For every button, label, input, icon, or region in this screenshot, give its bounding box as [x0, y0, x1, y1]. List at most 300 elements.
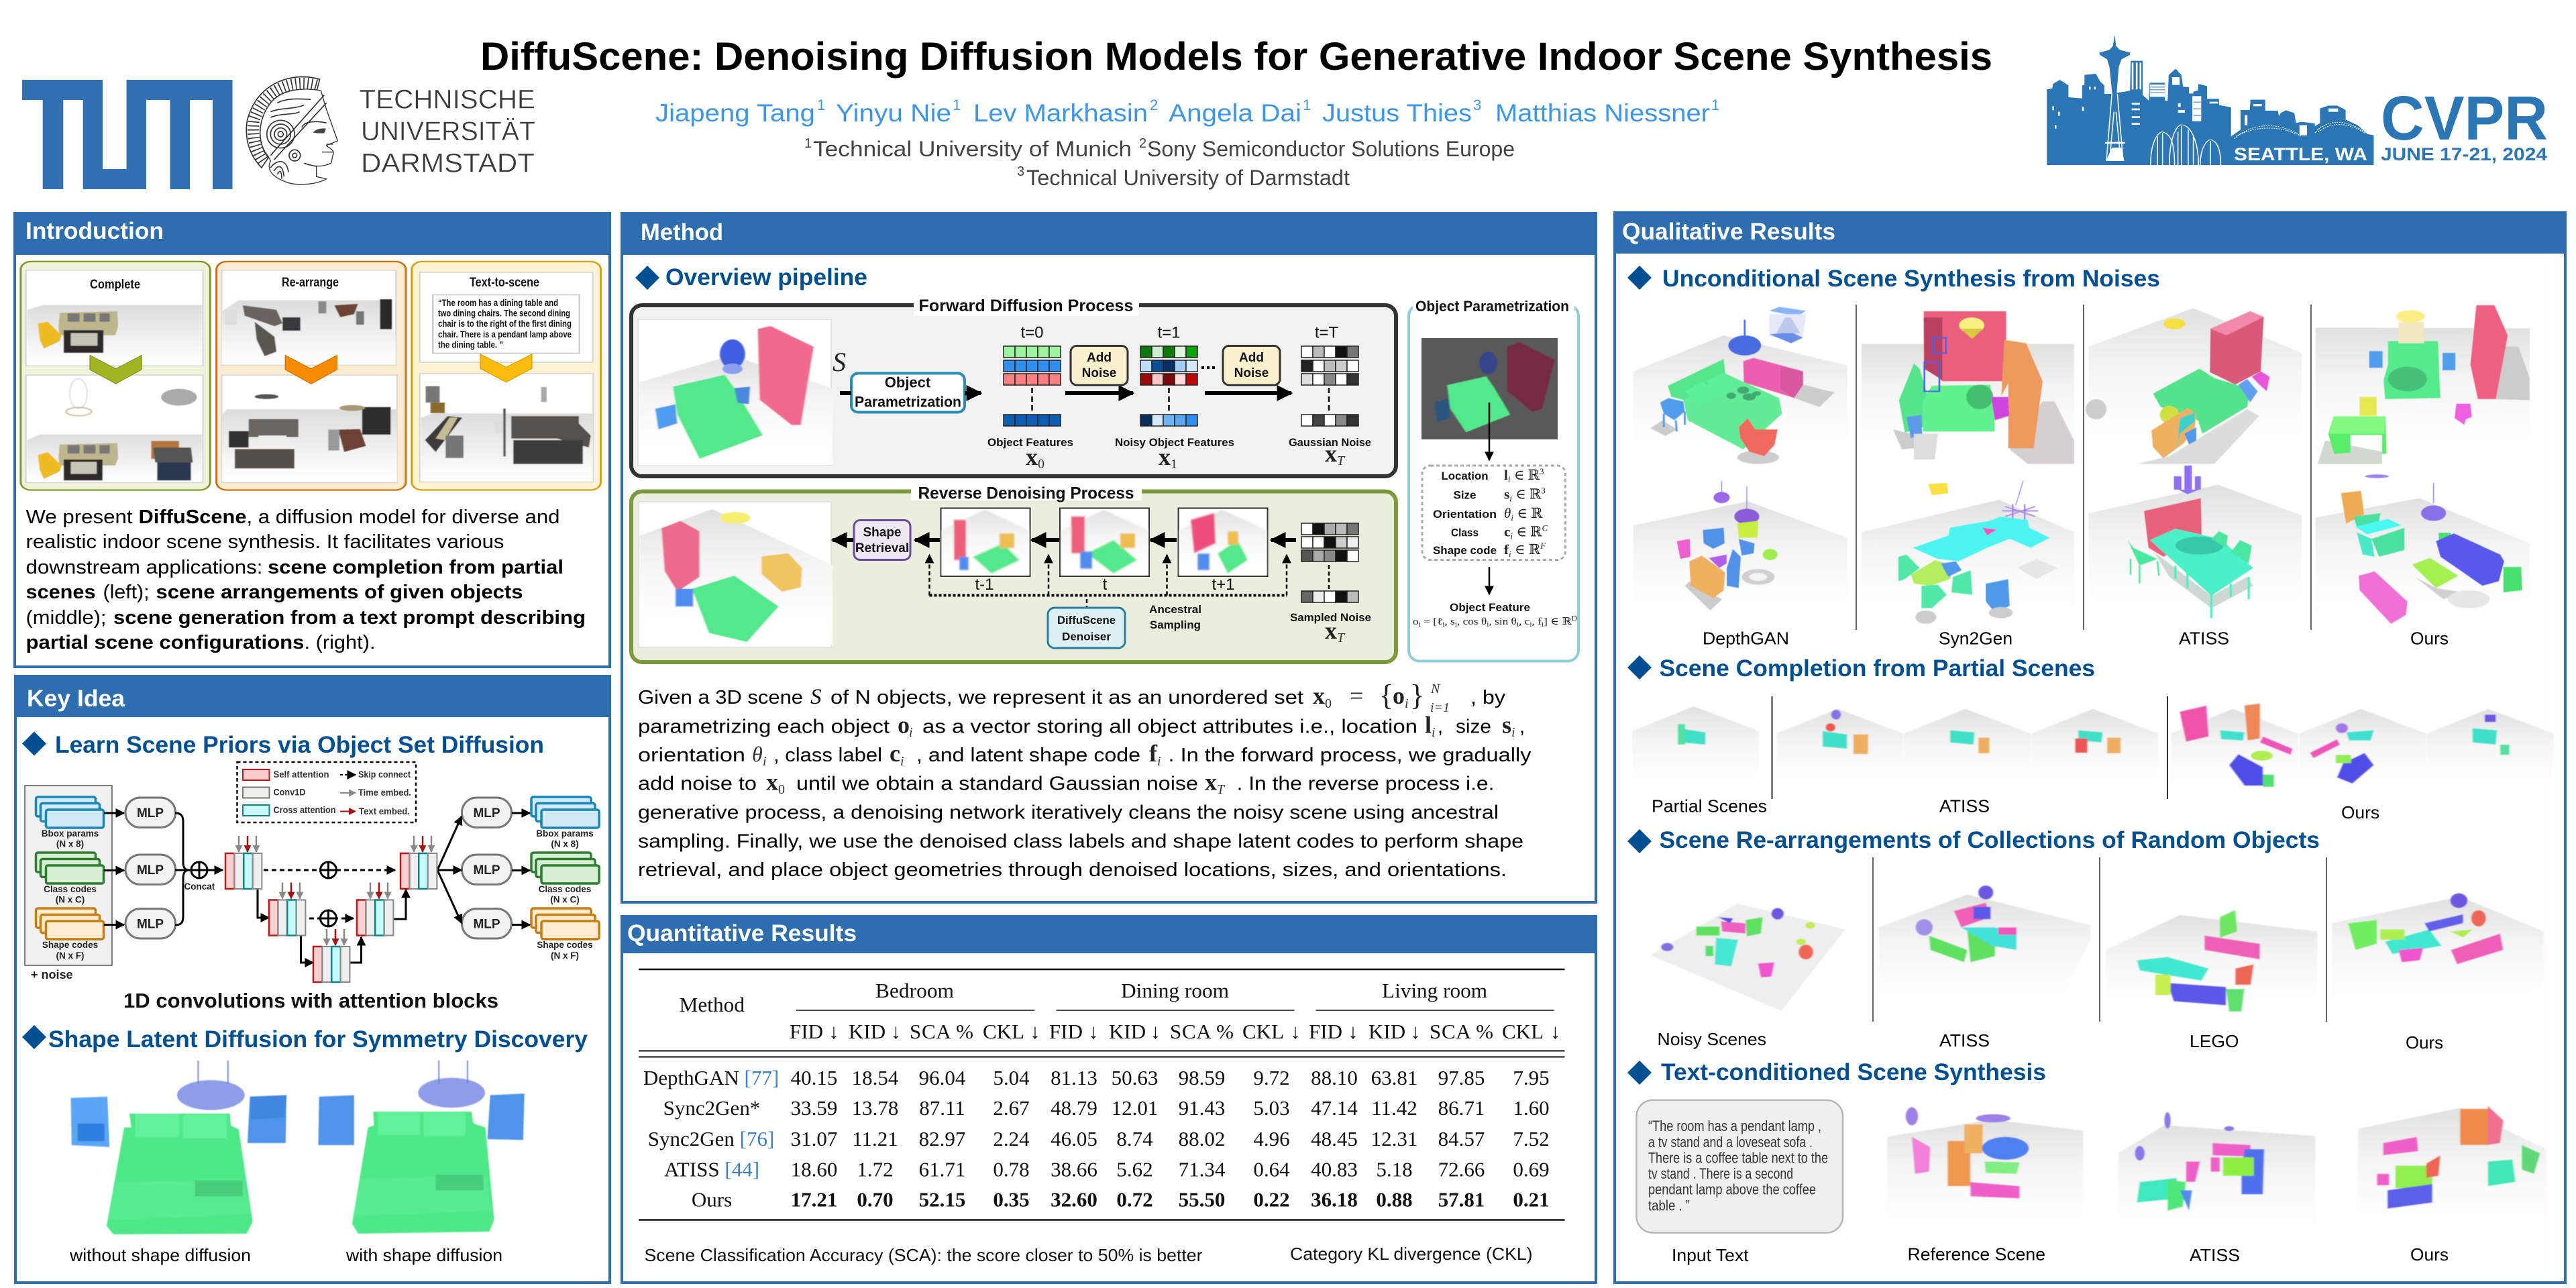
diagram: object parametrization: , f: [1532, 616, 1542, 627]
results table: 46.05: [1051, 1127, 1097, 1150]
subheading: Shape Latent Diffusion: Shape Latent Diffusion for Symmetry Discovery: [48, 1026, 588, 1053]
image grid: scene re-arrangement: [1651, 857, 2544, 1022]
text block: introduction paragraph: partial scene configurations: [25, 632, 305, 653]
results table: 0.69: [1513, 1158, 1550, 1181]
text block: method paragraph: , by: [1470, 687, 1506, 708]
diagram: object parametrization: i: [1508, 474, 1511, 484]
text block: introduction paragraph: scene completion from partial: [268, 557, 564, 578]
results table: 86.71: [1438, 1096, 1485, 1120]
callout: input text: a tv stand and a loveseat sofa .: [1648, 1134, 1813, 1150]
illustrations: complete, re-arrange, text-to-scene: chair. There is a pendant lamp above: [438, 329, 572, 339]
results table: 18.54: [852, 1066, 899, 1089]
results table: 2.67: [993, 1096, 1030, 1120]
results table: SCA %: [1170, 1020, 1234, 1043]
results table: KID: [849, 1020, 885, 1043]
results table: 88.10: [1311, 1066, 1358, 1089]
diagram: object parametrization: Size: [1453, 488, 1476, 502]
text block: method paragraph: add noise to: [638, 773, 757, 794]
diagram: object set diffusion U-Net: Shape codes: [42, 940, 98, 950]
results table: 40.15: [791, 1066, 837, 1089]
diagram: object set diffusion U-Net: Bbox params: [536, 828, 594, 839]
diagram: object parametrization: ∈ ℝ: [1510, 467, 1540, 483]
results table: 11.21: [852, 1127, 898, 1150]
diagram: reverse denoising process: x: [1325, 617, 1337, 644]
illustrations: complete, re-arrange, text-to-scene: Complete: [90, 278, 140, 292]
diagram: reverse denoising process: t: [1103, 576, 1108, 594]
authors: 2: [1150, 97, 1158, 113]
text block: method paragraph: of N objects, we represent it as an unordered set: [830, 687, 1303, 708]
label row: unconditional methods: Syn2Gen: [1939, 628, 2012, 648]
callout: input text: table . ”: [1648, 1197, 1690, 1214]
results table: 52.15: [919, 1187, 965, 1212]
token stack: t=0 object features: [1004, 346, 1061, 426]
results table: 32.60: [1051, 1187, 1097, 1212]
diagram: forward diffusion process: Noise: [1234, 366, 1269, 380]
diagram: object parametrization: i: [1511, 513, 1513, 523]
results table: CKL: [1242, 1020, 1284, 1043]
results table: 11.42: [1371, 1096, 1417, 1120]
affiliations: [804, 136, 1515, 190]
results table: 4.96: [1253, 1127, 1290, 1150]
diagram: object parametrization: F: [1540, 541, 1546, 551]
diagram: forward diffusion process: Object: [885, 374, 931, 390]
results table: 36.18: [1311, 1187, 1358, 1212]
results table: 55.50: [1179, 1187, 1225, 1212]
label row: re-arrangement methods: ATISS: [1939, 1030, 1990, 1051]
scenes: ATISS and Ours columns: [2086, 305, 2530, 625]
results table: 71.34: [1179, 1158, 1226, 1181]
text block: method paragraph: x: [1205, 769, 1217, 796]
results table: 88.02: [1179, 1127, 1225, 1150]
diagram: object parametrization: i: [1455, 621, 1457, 629]
diagram: forward diffusion process: Noise: [1082, 366, 1116, 380]
diagram: object set diffusion U-Net: Cross attention: [274, 805, 335, 815]
heading: Quantitative Results: Quantitative Results: [627, 920, 857, 947]
text block: method paragraph: f: [1149, 740, 1158, 767]
results table: 12.01: [1112, 1096, 1158, 1120]
caption: without shape diffusion: without shape diffusion: [69, 1245, 251, 1265]
illustrations: complete, re-arrange, text-to-scene: [21, 262, 601, 490]
diagram: reverse denoising process: Reverse Denoising Process: [918, 484, 1134, 503]
diagram: forward diffusion process: x: [1325, 440, 1337, 467]
results table: 47.14: [1311, 1096, 1358, 1120]
authors: Angela Dai: [1169, 99, 1301, 127]
results table: FID: [1309, 1020, 1342, 1043]
results table: 5.62: [1116, 1158, 1153, 1181]
results table: SCA %: [1430, 1020, 1493, 1043]
diagram: object parametrization: i: [1542, 621, 1544, 629]
text block: introduction paragraph: , a diffusion model for diverse and: [247, 506, 559, 528]
results table: 48.45: [1311, 1127, 1358, 1150]
diagram: object parametrization: ∈ ℝ: [1511, 541, 1541, 557]
results table: 1.60: [1513, 1096, 1550, 1120]
results table: 7.52: [1513, 1127, 1550, 1150]
callout: input text: “The room has a pendant lamp ,: [1648, 1118, 1821, 1134]
diagram: object parametrization: s: [1504, 486, 1509, 502]
logo: TU Darmstadt Athena head and wordmark: [246, 76, 535, 184]
text block: method paragraph: retrieval, and place object geometries through denoised locations, sizes, and orientations.: [638, 859, 1507, 881]
text block: method paragraph: Given a 3D scene: [638, 687, 803, 708]
affiliations: Technical University of Munich: [813, 137, 1132, 161]
diagram: forward diffusion process: Add: [1087, 351, 1112, 365]
text block: introduction paragraph: DiffuScene: [138, 506, 247, 528]
token stack: t=1 noisy object features: [1140, 346, 1197, 426]
text block: method paragraph: 0: [1325, 696, 1332, 711]
diagram: object parametrization: i: [1419, 621, 1421, 629]
label: ATISS completion: ATISS: [1939, 796, 1990, 816]
text block: method paragraph: i: [1405, 696, 1409, 711]
diagram: object set diffusion U-Net: (N x F): [551, 951, 579, 961]
results table: 5.18: [1376, 1158, 1413, 1181]
diagram: object set diffusion U-Net: MLP: [473, 918, 500, 931]
text block: introduction paragraph: scene generation from a text prompt describing: [113, 607, 586, 629]
diagram: object set diffusion U-Net: MLP: [137, 806, 164, 820]
results table: 7.95: [1513, 1066, 1550, 1089]
results table: Bedroom: [875, 979, 954, 1002]
authors: Justus Thies: [1322, 99, 1472, 127]
label row: text-conditioned methods: ATISS: [2190, 1245, 2240, 1265]
results table: 5.04: [993, 1066, 1030, 1089]
results table: 0.72: [1116, 1187, 1153, 1212]
diagram: object set diffusion U-Net: Class codes: [539, 884, 591, 894]
diagram: object set diffusion U-Net: Skip connect: [358, 769, 411, 780]
label row: text-conditioned methods: Ours: [2410, 1244, 2449, 1265]
label: Ours completion: Ours: [2341, 802, 2379, 822]
image grid: scene completion: [1632, 696, 2554, 799]
results table: 40.83: [1311, 1158, 1358, 1181]
text block: method paragraph: x: [1313, 682, 1325, 709]
text block: introduction paragraph: downstream applications:: [25, 557, 263, 578]
diagram: reverse denoising process: Denoiser: [1062, 631, 1111, 643]
diagram: forward diffusion process: t=T: [1315, 323, 1339, 342]
panel: Introduction: [14, 212, 610, 667]
diagram: object set diffusion U-Net: Shape codes: [537, 940, 593, 950]
results table: 91.43: [1179, 1096, 1225, 1120]
results table: ↓: [1030, 1020, 1040, 1043]
logo: CVPR Seattle skyline: SEATTLE, WA: [2234, 144, 2367, 164]
authors: 1: [953, 97, 961, 113]
diagram: object set diffusion U-Net: MLP: [137, 918, 164, 931]
subheading: Overview pipeline: Overview pipeline: [665, 264, 867, 290]
diagram: object parametrization: Orientation: [1433, 508, 1497, 521]
token stack: t=T gaussian noise: [1301, 346, 1358, 426]
results table: 13.78: [852, 1096, 898, 1120]
text block: method paragraph: {: [1379, 679, 1393, 712]
text block: method paragraph: o: [898, 711, 910, 738]
text block: method paragraph: i: [1511, 725, 1515, 740]
results table: 48.79: [1051, 1096, 1097, 1120]
text block: method paragraph: i: [763, 754, 767, 769]
title: DiffuScene: Denoising Diffusion Models for Generative Indoor Scene Synthesis: [480, 35, 1992, 78]
results table: ↓: [1150, 1020, 1161, 1043]
subheading: Text-conditioned: Text-conditioned Scene Synthesis: [1661, 1059, 2046, 1085]
logo: TU Darmstadt Athena head and wordmark: DARMSTADT: [361, 149, 535, 178]
diagram: object parametrization: Object Parametrization: [1415, 298, 1569, 315]
results table: 1.72: [857, 1158, 894, 1181]
footnote: CKL: Category KL divergence (CKL): [1290, 1244, 1532, 1264]
diagram: forward diffusion process: x: [1026, 443, 1038, 470]
authors: Jiapeng Tang: [655, 99, 815, 127]
text block: method paragraph: parametrizing each object: [638, 716, 890, 738]
text block: introduction paragraph: scenes: [25, 582, 95, 603]
caption: with shape diffusion: with shape diffusion: [345, 1245, 502, 1265]
diagram: object set diffusion U-Net: (N x C): [56, 895, 85, 904]
illustrations: complete, re-arrange, text-to-scene: the dining table. ”: [438, 339, 503, 350]
label row: text-conditioned methods: [1672, 1244, 2449, 1265]
text block: method paragraph: , class label: [773, 745, 882, 766]
text block: method paragraph: size: [1456, 716, 1491, 738]
diagram: object parametrization: i: [1509, 549, 1511, 559]
diagram: forward diffusion process: Object Features: [987, 436, 1073, 449]
diagram: reverse denoising process: Ancestral: [1149, 603, 1201, 616]
diagram: object parametrization: 3: [1541, 486, 1546, 495]
results table: 98.59: [1179, 1066, 1225, 1089]
diagram: object parametrization: Object Feature: [1450, 601, 1530, 614]
diagram: forward diffusion process: Noisy Object Features: [1115, 436, 1234, 449]
text block: method paragraph: , and latent shape code: [916, 745, 1140, 766]
label row: unconditional methods: Ours: [2410, 628, 2449, 648]
results table: 57.81: [1438, 1187, 1485, 1212]
diagram: object set diffusion U-Net: Concat: [184, 881, 215, 892]
diagram: object parametrization: i: [1529, 621, 1532, 629]
authors: 1: [817, 97, 825, 113]
results table: 31.07: [791, 1127, 837, 1150]
diagram: object set diffusion U-Net: + noise: [31, 968, 73, 981]
text block: method paragraph: =: [1350, 682, 1363, 709]
diagram: object set diffusion U-Net: (N x 8): [56, 839, 84, 849]
diagram: object set diffusion U-Net: (N x F): [56, 951, 85, 961]
diagram: object parametrization: , cos θ: [1457, 616, 1487, 627]
text block: method paragraph: i: [900, 754, 904, 769]
diagram: object parametrization: i: [1517, 621, 1519, 629]
diagram: forward diffusion process: Parametrization: [855, 393, 961, 411]
text block: introduction paragraph: . (right).: [305, 632, 376, 653]
results table: 97.85: [1438, 1066, 1485, 1089]
diagram: object set diffusion U-Net: (N x C): [550, 895, 580, 904]
label row: text-conditioned methods: Input Text: [1672, 1245, 1749, 1265]
diagram: object set diffusion U-Net: [25, 762, 599, 982]
results table: KID: [1368, 1020, 1405, 1043]
diagram: reverse denoising process: DiffuScene: [1057, 614, 1116, 627]
authors: Yinyu Nie: [836, 99, 951, 127]
subheading: Scene Re-arrangements: Scene Re-arrangements of Collections of Random Objects: [1660, 827, 2320, 853]
heading: Qualitative Results: Qualitative Results: [1622, 219, 1835, 245]
illustrations: complete, re-arrange, text-to-scene: Text-to-scene: [470, 276, 539, 290]
panel: Quantitative Results: [621, 915, 1597, 1283]
results table: ↓: [1290, 1020, 1301, 1043]
diagram: forward diffusion process: t=0: [1020, 323, 1044, 342]
diagram: object set diffusion U-Net: (N x 8): [551, 839, 579, 849]
results table: 17.21: [791, 1187, 837, 1212]
authors: 1: [1711, 97, 1719, 113]
diagram: reverse denoising process: T: [1337, 631, 1346, 645]
heading: Method: Method: [641, 219, 723, 246]
results table: 33.59: [791, 1096, 837, 1120]
label row: re-arrangement methods: [1657, 1029, 2443, 1053]
logo: CVPR Seattle skyline: [2047, 35, 2548, 165]
text block: method paragraph: N: [1430, 682, 1441, 696]
logo: TU Darmstadt Athena head and wordmark: UNIVERSITÄT: [361, 117, 535, 146]
diagram: object parametrization: Shape code: [1433, 544, 1497, 557]
results table: 0.88: [1376, 1187, 1413, 1212]
text block: method paragraph: orientation: [638, 745, 745, 766]
text block: method paragraph: i: [1432, 725, 1436, 740]
results table: 8.74: [1116, 1127, 1153, 1150]
label row: unconditional methods: DepthGAN: [1703, 628, 1789, 648]
results table: 0.70: [857, 1187, 894, 1212]
results table: 18.60: [791, 1158, 837, 1181]
panel: Method: [621, 212, 1597, 902]
authors: 1: [1303, 97, 1311, 113]
results table: Method: [679, 993, 745, 1016]
diagram: object parametrization: D: [1572, 615, 1577, 623]
results table: Sync2Gen [76]: [648, 1127, 774, 1150]
text block: method paragraph: 0: [778, 782, 785, 797]
diagram: forward diffusion process: 0: [1038, 457, 1044, 472]
diagram: object parametrization: f: [1504, 541, 1509, 557]
illustration: beds with and without shape diffusion: [71, 1061, 525, 1234]
affiliations: Technical University of Darmstadt: [1026, 166, 1350, 190]
label row: re-arrangement methods: Ours: [2406, 1032, 2443, 1053]
text block: introduction paragraph: scene arrangements of given objects: [156, 582, 523, 603]
text block: method paragraph: generative process, a denoising network iteratively cleans the noisy scene using ancestral: [638, 802, 1499, 824]
diagram: object parametrization: l: [1504, 467, 1508, 483]
affiliations: 2: [1139, 136, 1146, 151]
illustrations: complete, re-arrange, text-to-scene: chair is to the right of the first dining: [438, 318, 572, 329]
authors: [655, 97, 1719, 127]
results table: 84.57: [1438, 1127, 1485, 1150]
text block: method paragraph: o: [1393, 682, 1405, 709]
image grid: unconditional synthesis scenes: [1633, 305, 2530, 630]
subheading: Scene Completion: Scene Completion from Partial Scenes: [1660, 655, 2095, 682]
diagram: object parametrization: c: [1504, 523, 1510, 539]
callout: input text: tv stand . There is a second: [1648, 1165, 1793, 1182]
diagram: object parametrization: ∈ ℝ: [1513, 505, 1543, 521]
logo: CVPR Seattle skyline: JUNE 17-21, 2024: [2381, 144, 2547, 164]
text block: method paragraph: ,: [1438, 716, 1443, 738]
results table: 0.21: [1513, 1187, 1550, 1212]
image row: text-conditioned scenes: [1887, 1106, 2546, 1242]
diagram: forward diffusion process: S: [833, 347, 846, 377]
text block: method paragraph: ,: [1519, 716, 1525, 738]
diagram: object set diffusion U-Net: Class codes: [44, 884, 97, 894]
text block: method paragraph: i: [909, 725, 913, 740]
results table: FID: [790, 1020, 823, 1043]
results table: 0.64: [1253, 1158, 1290, 1181]
token stack: sampled noise: [1301, 523, 1358, 602]
text block: method paragraph: T: [1217, 782, 1226, 797]
diagram: forward diffusion process: Forward Diffusion Process: [919, 297, 1134, 315]
label: Partial Scenes: Partial Scenes: [1652, 796, 1767, 816]
callout: input text: There is a coffee table next to the: [1648, 1150, 1828, 1166]
results table: 5.03: [1253, 1096, 1290, 1120]
diagram: object parametrization: Class: [1451, 526, 1479, 539]
label row: unconditional methods: ATISS: [2179, 628, 2229, 648]
diagram: forward diffusion process: Add: [1239, 351, 1264, 365]
text block: introduction paragraph: We present: [25, 506, 133, 528]
diagram: reverse denoising process: Retrieval: [855, 541, 909, 555]
heading: Key Idea: Key Idea: [27, 686, 125, 712]
diagram: object parametrization: , c: [1519, 616, 1530, 627]
diagram: forward diffusion process: Gaussian Noise: [1289, 436, 1371, 449]
text block: method paragraph: . In the reverse process i.e.: [1237, 773, 1495, 794]
authors: Lev Markhasin: [973, 99, 1148, 127]
label row: re-arrangement methods: Noisy Scenes: [1657, 1029, 1766, 1049]
text block: method paragraph: i: [1157, 754, 1161, 769]
results table: Ours: [692, 1187, 732, 1212]
results table: KID: [1109, 1020, 1146, 1043]
results table: 0.78: [993, 1158, 1030, 1181]
panel: Key Idea: [14, 675, 610, 1283]
results table: Living room: [1382, 979, 1487, 1002]
diagram: object set diffusion U-Net: MLP: [473, 806, 500, 820]
text block: method paragraph: θ: [752, 742, 763, 766]
results table: 50.63: [1112, 1066, 1158, 1089]
results table: ↓: [1550, 1020, 1560, 1043]
results table: 0.35: [993, 1187, 1030, 1212]
results table: FID: [1049, 1020, 1083, 1043]
diagram: reverse denoising process: t+1: [1212, 576, 1235, 594]
results table: ATISS [44]: [664, 1158, 759, 1181]
diagram: object parametrization: i: [1442, 621, 1445, 629]
logo: TUM: [22, 80, 232, 189]
diagram: reverse denoising process: t-1: [975, 576, 994, 594]
label row: unconditional methods: [1703, 628, 2449, 648]
diagram: reverse denoising process: Sampled Noise: [1290, 611, 1371, 624]
diagram: object parametrization: , s: [1444, 616, 1455, 627]
footnote: SCA: Scene Classification Accuracy (SCA): the score closer to 50% is better: [644, 1245, 1203, 1265]
text block: method paragraph: sampling. Finally, we use the denoised class labels and shape latent codes to perform shape: [638, 830, 1523, 852]
subheading: Unconditional Scene Synthesis: Unconditional Scene Synthesis from Noises: [1662, 266, 2160, 292]
authors: 3: [1473, 97, 1481, 113]
diagram: object set diffusion U-Net: MLP: [473, 863, 500, 877]
text block: method paragraph: S: [810, 685, 821, 709]
affiliations: 3: [1017, 164, 1024, 179]
diagram: object parametrization: , sin θ: [1489, 616, 1517, 627]
text block: introduction paragraph: realistic indoor scene synthesis. It facilitates various: [25, 531, 504, 553]
caption: 1D convolutions: 1D convolutions with attention blocks: [123, 989, 498, 1012]
results table: ↓: [1348, 1020, 1358, 1043]
text block: introduction paragraph: [25, 506, 586, 653]
subheading: Learn Scene Priors: Learn Scene Priors via Object Set Diffusion: [55, 732, 544, 758]
authors: Matthias Niessner: [1495, 99, 1710, 127]
results table: 72.66: [1438, 1158, 1485, 1181]
diagram: object parametrization: Location: [1441, 470, 1488, 482]
text block: method paragraph: as a vector storing all object attributes i.e., location: [922, 716, 1417, 738]
diagram: reverse denoising process: Shape: [863, 526, 902, 539]
diagram: reverse denoising process: Sampling: [1150, 619, 1201, 631]
results table: 82.97: [919, 1127, 965, 1150]
callout: input text: [1637, 1100, 1843, 1233]
illustrations: complete, re-arrange, text-to-scene: “The room has a dining table and: [438, 297, 558, 308]
text block: method paragraph: c: [890, 740, 900, 767]
diagram: forward diffusion process: T: [1337, 453, 1346, 468]
results table: 63.81: [1371, 1066, 1417, 1089]
diagram: object parametrization: i: [1487, 621, 1489, 629]
results table: 2.24: [993, 1127, 1030, 1150]
diagram: object parametrization: = [ℓ: [1421, 616, 1442, 627]
results table: Dining room: [1121, 979, 1229, 1002]
results table: ↓: [1088, 1020, 1099, 1043]
diagram: forward diffusion process: x: [1159, 443, 1171, 470]
diagram: object set diffusion U-Net: Bbox params: [42, 828, 99, 839]
diagram: forward diffusion process: [631, 297, 1396, 476]
diagram: object parametrization: ∈ ℝ: [1513, 523, 1542, 539]
results table: ↓: [828, 1020, 839, 1043]
results table: SCA %: [910, 1020, 973, 1043]
affiliations: 1: [804, 136, 812, 151]
diagram: object parametrization: 3: [1540, 466, 1544, 476]
